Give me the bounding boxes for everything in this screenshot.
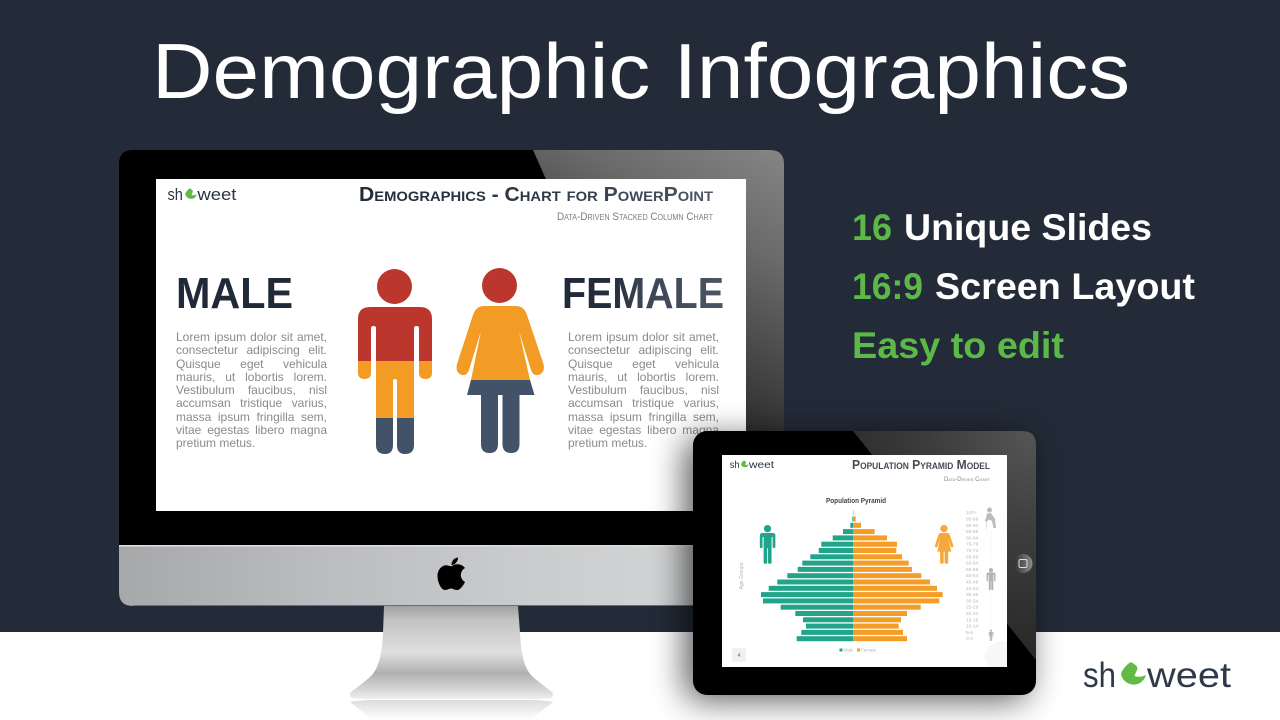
age group labels: 45-49 (966, 580, 979, 586)
text block: male: massa ipsum fringilla sem, (176, 410, 327, 424)
text block: female: accumsan tristique varius, (568, 396, 719, 410)
age group labels: 80-84 (966, 535, 979, 541)
icon: male figure (358, 269, 432, 454)
pyramid bars female (853, 510, 943, 641)
text block: female: consectetur adipiscing elit. (568, 343, 719, 357)
age group labels: 100+ (966, 510, 977, 516)
text block: female: Quisque eget vehicula (568, 357, 719, 371)
logo: showeet tiny (730, 459, 774, 471)
text block: male (176, 331, 328, 456)
pyramid slide heading: Population Pyramid Model (852, 457, 990, 472)
text block: male: vitae egestas libero magna (176, 423, 327, 437)
text block: male: consectetur adipiscing elit. (176, 343, 327, 357)
text block: male: accumsan tristique varius, (176, 396, 327, 410)
age group labels: 65-69 (966, 554, 979, 560)
age group labels: 90-94 (966, 523, 979, 529)
age group labels: 35-39 (966, 592, 979, 598)
heading: female: FEMALE (562, 269, 724, 318)
age group labels: 85-89 (966, 529, 979, 535)
bezel glare (533, 150, 784, 545)
age group labels (966, 510, 979, 642)
text block: female: vitae egestas libero magna (568, 423, 719, 437)
feature: unique slides: Unique Slides (904, 207, 1152, 248)
age group labels: 95-99 (966, 516, 979, 522)
desktop monitor (119, 150, 784, 606)
watermark (985, 641, 1007, 667)
feature: screen layout: Screen Layout (935, 266, 1195, 307)
logo: showeet tiny: sh (730, 459, 740, 471)
tablet shadow (685, 438, 1028, 700)
age group labels: 50-54 (966, 573, 979, 579)
chart legend: Male (844, 648, 854, 652)
age group labels: 30-34 (966, 598, 979, 604)
page number box: 4 (738, 653, 741, 659)
logo: showeet: weet (1146, 656, 1231, 695)
icon: adult figure (987, 568, 996, 590)
slide heading: Demographics - Chart for PowerPoint (359, 184, 713, 206)
age group labels: 15-19 (966, 617, 979, 623)
tablet slide background (722, 455, 1007, 667)
text block: female (568, 331, 720, 456)
age group labels: 10-14 (966, 624, 979, 630)
tablet glare (853, 431, 1036, 660)
age group labels: 60-64 (966, 561, 979, 567)
monitor chin (119, 545, 784, 606)
stand body (350, 606, 553, 699)
text block: female: mauris, ut lobortis lorem. (568, 370, 719, 384)
icon: teal male figure (760, 525, 775, 564)
icon: apple logo (438, 558, 465, 590)
age group labels: 75-79 (966, 542, 979, 548)
chart legend: Female (861, 648, 877, 652)
text block: male: mauris, ut lobortis lorem. (176, 370, 327, 384)
chart legend (840, 648, 877, 652)
feature: easy to edit: Easy to edit (852, 325, 1064, 366)
logo: showeet small (168, 186, 237, 204)
age group labels: 70-74 (966, 548, 979, 554)
icon: elderly figure (985, 508, 996, 529)
chart title: Population Pyramid (826, 498, 886, 505)
age group labels: 20-24 (966, 611, 979, 617)
text block: male: pretium metus. (176, 436, 255, 450)
monitor bezel (119, 150, 784, 545)
text block: male: Quisque eget vehicula (176, 357, 327, 371)
text block: male: Vestibulum faucibus, nisl (176, 383, 327, 397)
age group labels: 0-4 (966, 636, 973, 642)
icon: home button (1014, 554, 1032, 573)
feature: unique slides: 16 (852, 207, 892, 248)
icon: child figure (989, 630, 993, 641)
pyramid bars male (761, 516, 853, 641)
tablet bezel (693, 431, 1036, 695)
logo: showeet: sh (1083, 656, 1116, 695)
text block: female: pretium metus. (568, 436, 647, 450)
age timeline dots (990, 531, 992, 626)
icon: female figure (456, 268, 544, 453)
title: Demographic Infographics (152, 27, 1130, 115)
heading: male: MALE (176, 269, 293, 318)
axis label: Age Groups (739, 562, 745, 589)
slide: demographics (156, 179, 746, 511)
tablet (693, 431, 1036, 695)
monitor stand (350, 606, 553, 720)
slide subheading: Data-Driven Stacked Column Chart (557, 211, 713, 223)
icon: showeet mark (1121, 662, 1146, 685)
logo: showeet small: weet (196, 186, 237, 204)
text block: female: Vestibulum faucibus, nisl (568, 383, 719, 397)
age group labels: 5-9 (966, 630, 973, 636)
logo: showeet (1083, 656, 1231, 695)
slide background (156, 179, 746, 511)
pyramid slide subheading: Data-Driven Chart (944, 477, 991, 483)
age group labels: 55-59 (966, 567, 979, 573)
age group labels: 40-44 (966, 586, 979, 592)
feature list (852, 207, 1195, 366)
icon: orange female figure (935, 525, 953, 564)
age group labels: 25-29 (966, 605, 979, 611)
stand reflection (350, 700, 553, 720)
feature: screen layout: 16:9 (852, 266, 923, 307)
logo: showeet small: sh (168, 186, 183, 204)
slide: population pyramid (722, 455, 1007, 667)
logo: showeet tiny: weet (748, 459, 774, 471)
text block: female: massa ipsum fringilla sem, (568, 410, 719, 424)
page number box (732, 648, 746, 662)
